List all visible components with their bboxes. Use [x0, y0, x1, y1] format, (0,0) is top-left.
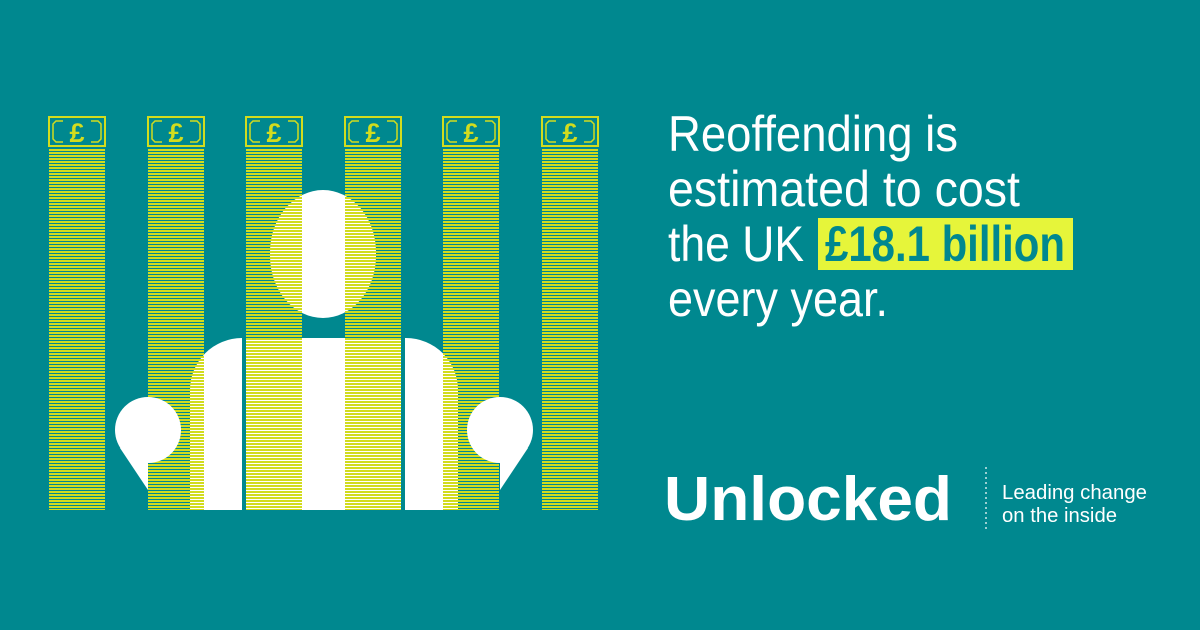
tagline: on the inside [1002, 505, 1117, 527]
logo: Unlocked: Unlocked [664, 465, 952, 534]
tagline: Leading change [1002, 482, 1147, 504]
divider [985, 467, 987, 530]
hands [115, 397, 533, 490]
headline text: every year. [668, 271, 888, 327]
bar 4 [345, 117, 401, 510]
bar 3 [246, 117, 302, 510]
headline text [668, 106, 1020, 327]
person: head and body [190, 190, 458, 510]
highlight: £18.1 billion: £18.1 billion [825, 216, 1065, 272]
bar 1 [49, 117, 105, 510]
headline text: the UK [668, 216, 804, 272]
bar 2 [148, 117, 204, 510]
headline text: Reoffending is [668, 106, 958, 162]
tagline [1002, 482, 1147, 527]
money bars [49, 117, 598, 510]
bar 6 [542, 117, 598, 510]
headline text: estimated to cost [668, 161, 1020, 217]
bar 5 [443, 117, 499, 510]
